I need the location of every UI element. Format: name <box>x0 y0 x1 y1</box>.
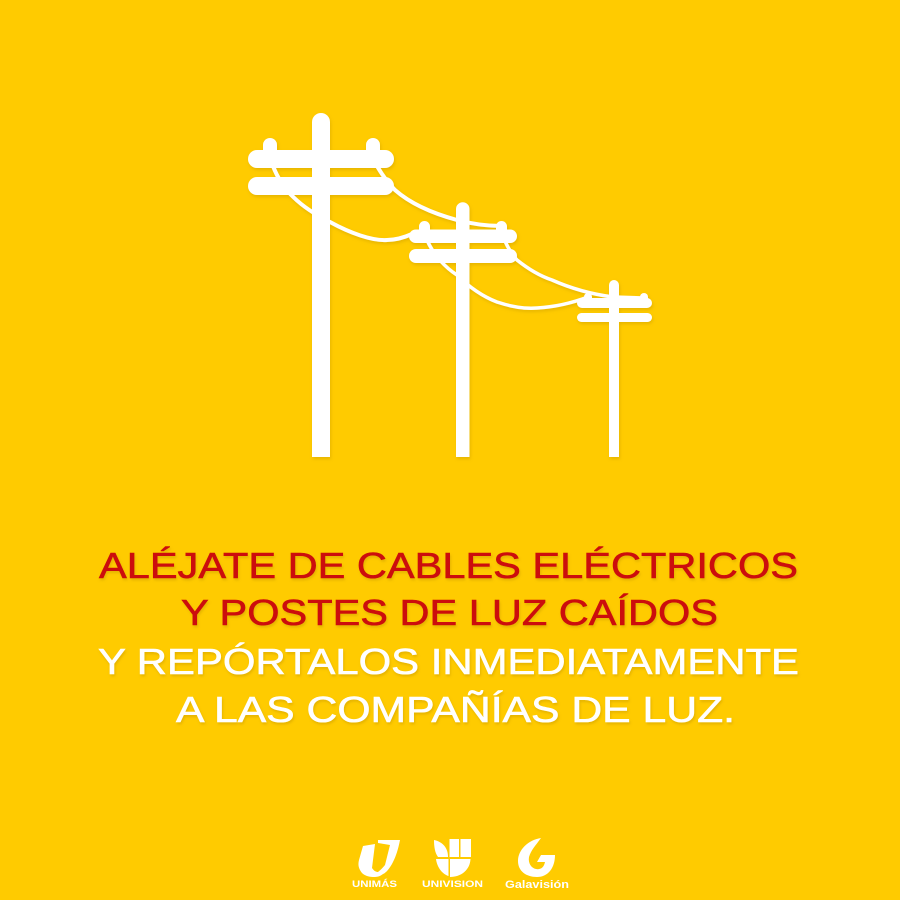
logo: UniMás <box>352 840 400 890</box>
cables <box>273 166 643 308</box>
logo: Galavisión: Galavisión <box>505 879 569 891</box>
logo: Galavisión <box>505 838 569 891</box>
headline: instruction in white: Y REPÓRTALOS INMEDIATAMENTE <box>98 641 799 682</box>
logo: Univision: UNIVISION <box>422 879 483 890</box>
pole 1 <box>248 113 394 457</box>
headline: warning in red: Y POSTES DE LUZ CAÍDOS <box>181 592 718 633</box>
logo: UniMás: UNIMÁS <box>352 879 397 890</box>
headline: instruction in white: A LAS COMPAÑÍAS DE LUZ. <box>176 689 735 730</box>
pole 3 <box>577 280 652 457</box>
headline: warning in red: ALÉJATE DE CABLES ELÉCTRICOS <box>99 545 798 586</box>
pole 2 <box>409 202 517 457</box>
logo: Univision <box>422 839 483 890</box>
illustration: utility poles and cables <box>248 113 652 457</box>
headline: instruction in white <box>98 641 799 730</box>
headline: warning in red <box>99 545 798 633</box>
